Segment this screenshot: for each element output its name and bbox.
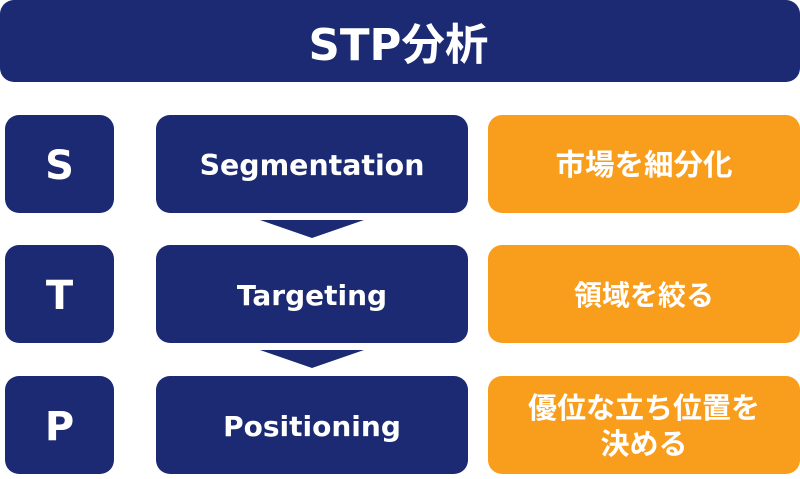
panel: Positioning <box>156 376 468 474</box>
arrow: Targeting to Positioning <box>260 350 364 368</box>
panel: Positioning: Positioning <box>223 410 401 442</box>
panel: Targeting <box>156 245 468 343</box>
title: STP分析 <box>309 20 488 70</box>
panel: targeting description <box>488 245 800 343</box>
panel: targeting description: 領域を絞る <box>574 280 714 310</box>
letter P: P <box>45 404 74 450</box>
panel: Segmentation <box>156 115 468 213</box>
arrow: Segmentation to Targeting <box>260 220 364 238</box>
letter P <box>5 376 114 474</box>
panel: positioning description: 優位な立ち位置を <box>528 392 760 424</box>
panel: Segmentation: Segmentation <box>200 148 424 182</box>
panel: market segmentation description <box>488 115 800 213</box>
letter T: T <box>46 272 73 318</box>
panel: market segmentation description: 市場を細分化 <box>555 148 732 182</box>
panel: Targeting: Targeting <box>237 278 387 312</box>
letter S <box>5 115 114 213</box>
title <box>0 0 800 82</box>
letter S: S <box>45 142 74 188</box>
panel: positioning description <box>488 376 800 474</box>
letter T <box>5 245 114 343</box>
panel: positioning description: 決める <box>600 428 688 460</box>
